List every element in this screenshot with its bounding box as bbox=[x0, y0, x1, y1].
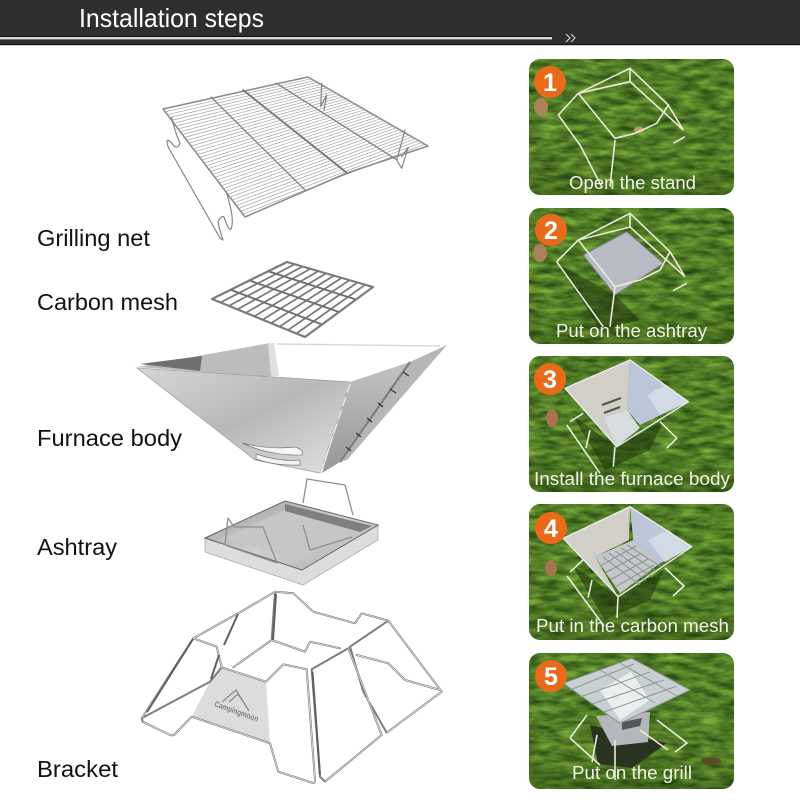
grilling net illustration bbox=[163, 77, 428, 240]
step 4 panel bbox=[529, 504, 734, 640]
legs bbox=[567, 413, 677, 473]
bracket thick joints bbox=[147, 594, 320, 775]
caption: Install the furnace body bbox=[534, 469, 730, 489]
icon: rock bbox=[545, 560, 557, 576]
logo plate bbox=[192, 667, 270, 743]
step 2 panel bbox=[529, 208, 734, 344]
open stand frame bbox=[558, 68, 685, 187]
step 1 panel bbox=[529, 59, 734, 195]
step number 4 bbox=[535, 512, 567, 544]
label: bracket: Bracket bbox=[37, 756, 119, 782]
caption: Open the stand bbox=[569, 173, 696, 193]
step number 4: 4 bbox=[544, 515, 558, 543]
step number 1: 1 bbox=[543, 69, 557, 97]
grill on top bbox=[563, 658, 690, 723]
front panel bbox=[137, 368, 350, 473]
vent slots bbox=[242, 443, 303, 465]
label: grilling net: Grilling net bbox=[37, 225, 151, 251]
right panel bbox=[322, 362, 410, 473]
carbon mesh illustration bbox=[212, 262, 373, 337]
header bar bbox=[0, 0, 800, 45]
icon: rock bbox=[533, 244, 547, 262]
step number 3: 3 bbox=[543, 366, 557, 394]
brand text: Campingmoon bbox=[213, 699, 260, 724]
icon: rock bbox=[546, 409, 558, 427]
shadow under furnace bbox=[572, 415, 664, 470]
caption: Put in the carbon mesh bbox=[536, 616, 729, 636]
shadow and lower body bbox=[590, 725, 667, 768]
far rim line bbox=[277, 344, 440, 346]
label: carbon mesh: Carbon mesh bbox=[37, 289, 178, 315]
bracket wires dark bbox=[142, 592, 442, 783]
step number 5 bbox=[535, 660, 567, 692]
step number 1 bbox=[534, 66, 566, 98]
step number 5: 5 bbox=[544, 663, 558, 691]
step number 2 bbox=[535, 214, 567, 246]
step 5 panel bbox=[529, 653, 734, 789]
caption: Put on the ashtray bbox=[556, 321, 707, 341]
ashtray in stand bbox=[583, 232, 663, 295]
bracket wires highlight bbox=[142, 592, 442, 783]
title: Installation steps bbox=[79, 3, 264, 33]
furnace body illustration bbox=[137, 343, 447, 473]
legs bbox=[567, 560, 684, 626]
shadow under tray bbox=[560, 265, 640, 330]
tray handles bbox=[225, 479, 353, 563]
icon: mountain logo bbox=[222, 690, 249, 711]
shadow under furnace bbox=[572, 565, 664, 620]
bracket illustration bbox=[142, 592, 442, 783]
icon: debris bbox=[701, 758, 721, 764]
legs bbox=[570, 715, 687, 780]
label: furnace body: Furnace body bbox=[37, 425, 183, 451]
step number 3 bbox=[534, 363, 566, 395]
step 3 panel bbox=[529, 356, 734, 492]
ashtray illustration bbox=[205, 479, 378, 585]
label: ashtray: Ashtray bbox=[37, 534, 118, 560]
stand frame bbox=[557, 213, 687, 327]
icon: rock bbox=[534, 98, 548, 116]
hinge bbox=[321, 362, 410, 472]
furnace with mesh bbox=[563, 507, 692, 597]
caption: Put on the grill bbox=[572, 763, 692, 783]
furnace in stand bbox=[565, 360, 688, 447]
step number 2: 2 bbox=[544, 217, 558, 245]
icon: double chevron bbox=[566, 34, 575, 42]
